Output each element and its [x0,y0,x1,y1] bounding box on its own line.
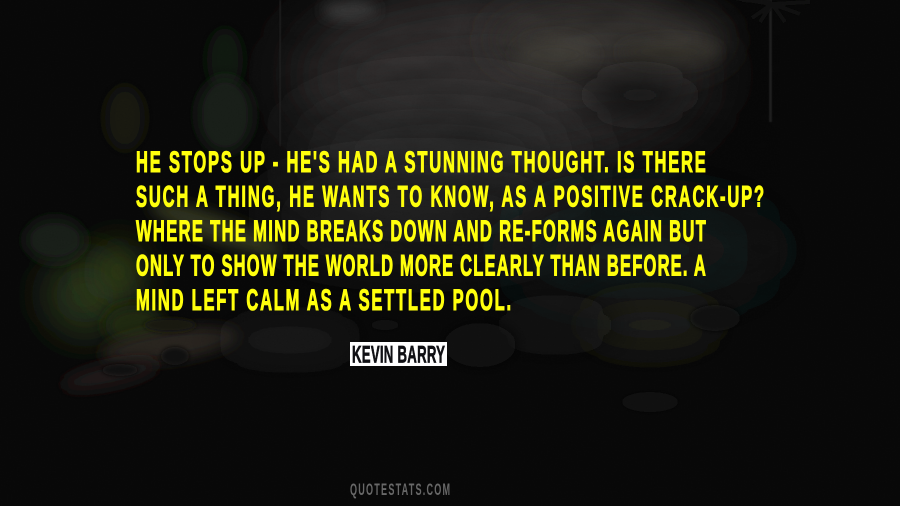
palm tree [735,0,810,122]
trees on left [105,0,281,153]
rocks [102,305,740,412]
sky clouds [260,0,780,300]
quote text: HE STOPS UP - HE'S HAD A STUNNING THOUGHT. IS THERE [136,146,706,179]
quote text: MIND LEFT CALM AS A SETTLED POOL. [136,284,511,317]
cloud mottling [280,0,780,300]
quote text: ONLY TO SHOW THE WORLD MORE CLEARLY THAN BEFORE. A [136,249,706,283]
shore path [59,299,720,397]
quote text [136,146,764,317]
quote text: SUCH A THING, HE WANTS TO KNOW, AS A POSITIVE CRACK-UP? [136,180,764,214]
website footer: QUOTESTATS.COM [350,480,450,499]
green bank [25,192,285,345]
quote text: WHERE THE MIND BREAKS DOWN AND RE-FORMS AGAIN BUT [136,215,706,248]
author label: KEVIN BARRY [352,341,445,369]
